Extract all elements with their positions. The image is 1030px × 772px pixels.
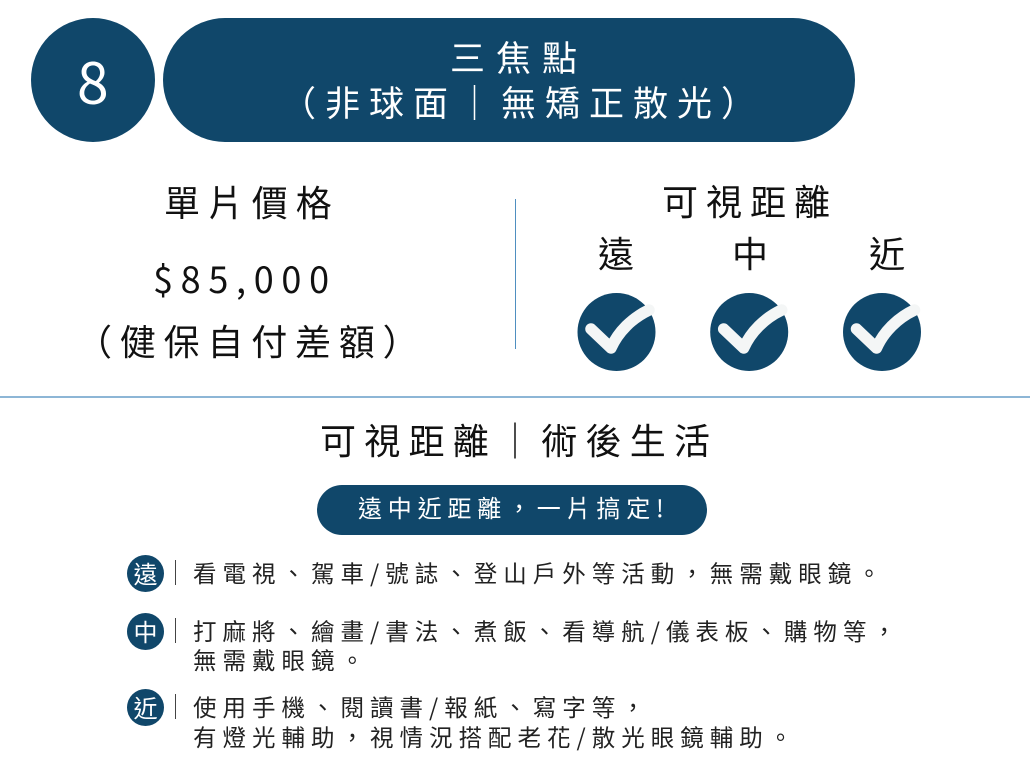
label near: 近 — [869, 226, 905, 278]
badge far — [127, 555, 164, 592]
panel: price — [76, 175, 426, 366]
title line 2: （非球面｜無矯正散光） — [281, 76, 765, 127]
pill: summary — [317, 485, 707, 535]
icon: check far — [578, 293, 656, 371]
badge near — [127, 689, 164, 726]
icon: check near — [843, 293, 921, 371]
text near: 有燈光輔助，視情況搭配老花/散光眼鏡輔助。 — [193, 719, 798, 753]
vertical divider — [515, 199, 516, 349]
title banner — [163, 18, 855, 142]
list row: mid — [127, 613, 902, 676]
number 8: 8 — [77, 39, 109, 121]
row bar far — [175, 560, 176, 585]
row bar near — [175, 694, 176, 719]
icon: check mid — [710, 293, 788, 371]
badge mid — [127, 613, 164, 650]
price amount: $85,000 — [153, 252, 337, 304]
list row: far — [127, 555, 887, 592]
number badge — [31, 18, 155, 142]
panel: visual distance — [578, 174, 921, 371]
price heading: 單片價格 — [164, 175, 340, 227]
text mid: 無需戴眼鏡。 — [193, 642, 370, 676]
badge far: 遠 — [134, 555, 158, 590]
badge near: 近 — [134, 689, 158, 724]
section heading: 可視距離｜術後生活 — [320, 413, 718, 465]
badge mid: 中 — [134, 613, 158, 648]
pill text: 遠中近距離，一片搞定! — [358, 489, 670, 524]
label far: 遠 — [598, 226, 634, 278]
title line 1: 三焦點 — [450, 31, 588, 82]
text mid: 打麻將、繪畫/書法、煮飯、看導航/儀表板、購物等， — [193, 613, 902, 647]
text far: 看電視、駕車/號誌、登山戶外等活動，無需戴眼鏡。 — [193, 555, 887, 589]
list row: near — [127, 689, 798, 753]
price note: （健保自付差額） — [76, 314, 426, 366]
text near: 使用手機、閱讀書/報紙、寫字等， — [193, 689, 651, 723]
label mid: 中 — [732, 226, 768, 278]
text near — [193, 689, 798, 753]
row bar mid — [175, 618, 176, 643]
check icons — [578, 293, 921, 371]
horizontal divider — [0, 396, 1030, 398]
text mid — [193, 613, 902, 676]
visual distance heading: 可視距離 — [662, 174, 838, 226]
